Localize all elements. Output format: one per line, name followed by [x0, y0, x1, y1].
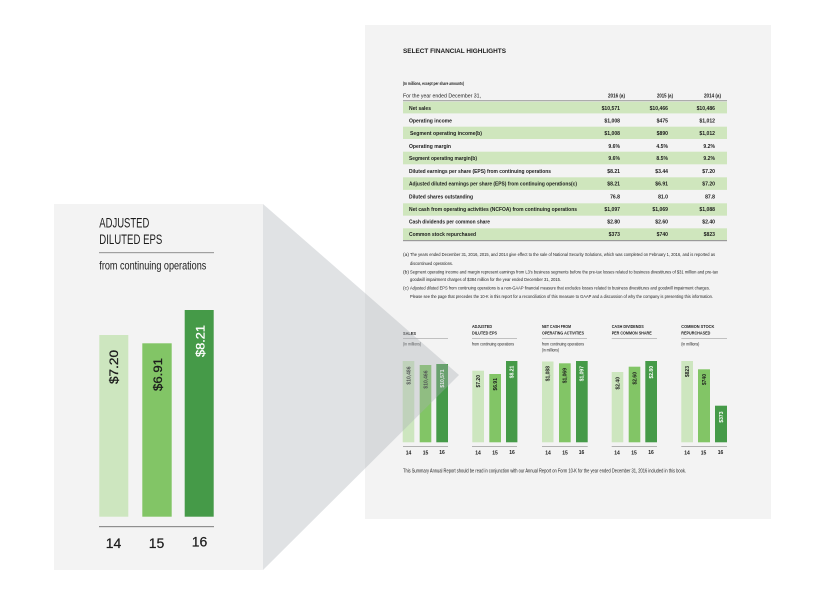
footnotes: (c) — [403, 286, 409, 292]
axis labels: 14 — [106, 535, 121, 551]
table: financial highlights: $1,012 — [699, 131, 715, 137]
table: financial highlights: Adjusted diluted earnings per share (EPS) from continuing operations(c) — [409, 182, 577, 188]
bar: 2015: $6.91 — [153, 358, 165, 391]
chart: cash dividends per common share: $2.80 — [649, 366, 655, 379]
chart: adjusted diluted eps: $6.91 — [493, 378, 499, 391]
chart: adjusted diluted eps: 16 — [509, 450, 515, 456]
chart: sales: $10,466 — [423, 370, 429, 389]
table: financial highlights: 9.2% — [703, 144, 715, 150]
table: financial highlights: $1,008 — [604, 118, 620, 124]
footnotes: (a) — [403, 252, 409, 258]
table: financial highlights: 9.2% — [703, 156, 715, 162]
table: financial highlights: 8.5% — [656, 156, 668, 162]
chart: sales: $10,571 — [440, 369, 446, 388]
chart: common stock repurchased: $823 — [685, 366, 691, 377]
chart: sales: (In millions) — [403, 342, 421, 346]
footnotes: Please see the page that precedes the 10-K in this report for a reconciliation of this measure to GAAP and a discussion of why the company is presenting this information. — [410, 294, 713, 300]
chart: sales: $10,486 — [406, 366, 412, 385]
table: financial highlights: Operating margin — [409, 144, 452, 150]
table: financial highlights: $890 — [657, 131, 668, 137]
chart: common stock repurchased — [681, 324, 727, 456]
table: financial highlights: $373 — [609, 232, 620, 238]
table: financial highlights: $823 — [704, 232, 715, 238]
table: financial highlights: $10,466 — [650, 106, 668, 112]
chart: cash dividends per common share — [612, 324, 657, 456]
axis labels: 15 — [149, 535, 164, 551]
chart: net cash from operating activities: 15 — [562, 450, 568, 456]
table: financial highlights: $475 — [657, 118, 668, 124]
bar: 2016: $8.21 — [196, 325, 208, 357]
footnotes: goodwill impairment charges of $384 million for the year ended December 31, 2015. — [410, 277, 561, 283]
chart: common stock repurchased: COMMON STOCK — [681, 324, 715, 329]
footnotes — [403, 252, 718, 300]
table: financial highlights: Diluted earnings per share (EPS) from continuing operations — [409, 169, 551, 175]
chart: adjusted diluted eps: $7.20 — [476, 375, 482, 388]
table: financial highlights: $1,069 — [652, 207, 668, 213]
chart: cash dividends per common share: 16 — [648, 450, 654, 456]
table: financial highlights: $2.80 — [607, 220, 620, 226]
panel: report page — [365, 25, 771, 519]
chart: sales — [403, 331, 448, 456]
bar: 2014 — [99, 335, 128, 517]
table: financial highlights: Operating income — [409, 118, 452, 124]
axis labels — [106, 534, 207, 551]
table: financial highlights: $7.20 — [702, 182, 715, 188]
table: financial highlights: $1,012 — [699, 118, 715, 124]
chart: cash dividends per common share: PER COMMON SHARE — [612, 330, 652, 336]
chart: net cash from operating activities: from continuing operations — [542, 342, 585, 346]
table: financial highlights: For the year ended December 31, — [403, 94, 481, 100]
subheading: from continuing operations — [99, 258, 206, 272]
footnotes: discontinued operations. — [410, 261, 453, 267]
chart: cash dividends per common share: 15 — [631, 450, 637, 456]
heading: select financial highlights: SELECT FINANCIAL HIGHLIGHTS — [403, 48, 506, 55]
table: financial highlights: $8.21 — [607, 169, 620, 175]
chart: common stock repurchased: 14 — [684, 450, 690, 456]
footnotes: (b) — [403, 270, 409, 276]
table: financial highlights: $6.91 — [655, 182, 668, 188]
bar: 2016 — [185, 310, 214, 517]
footer note: This Summary Annual Report should be read in conjunction with our Annual Report on Form 10-K for the year ended December 31, 2016 included in this book. — [403, 468, 686, 474]
footnotes: Adjusted diluted EPS from continuing operations is a non-GAAP financial measure that excludes losses related to business divestitures and goodwill impairment charges. — [410, 286, 710, 292]
table: financial highlights: Diluted shares outstanding — [409, 194, 474, 200]
chart: cash dividends per common share: CASH DIVIDENDS — [612, 324, 644, 329]
table: financial highlights: $10,486 — [697, 106, 715, 112]
table: financial highlights: (In millions, except per share amounts) — [403, 81, 464, 87]
table: financial highlights: $740 — [657, 232, 668, 238]
footnotes: Segment operating income and margin represent earnings from L3's business segments before the pre-tax losses related to business divestitures of $31 million and pre-tax — [410, 270, 718, 276]
table: financial highlights: $3.44 — [655, 169, 668, 175]
chart: net cash from operating activities: 16 — [579, 450, 584, 456]
chart: net cash from operating activities: NET CASH FROM — [542, 324, 571, 329]
chart: common stock repurchased: (in millions) — [681, 342, 700, 346]
table: financial highlights: 87.8 — [705, 194, 715, 200]
table: financial highlights: $8.21 — [607, 182, 620, 188]
chart: sales: 16 — [439, 450, 445, 456]
table: financial highlights: 9.6% — [608, 144, 620, 150]
table: financial highlights: 81.0 — [658, 194, 668, 200]
chart: net cash from operating activities: $1,069 — [563, 368, 569, 383]
table: financial highlights: Net cash from operating activities (NCFOA) from continuing operations — [409, 207, 577, 213]
chart: sales: SALES — [403, 331, 416, 336]
table: financial highlights — [403, 81, 727, 241]
chart: net cash from operating activities: (in millions) — [542, 348, 559, 352]
chart: net cash from operating activities — [542, 324, 588, 456]
table: financial highlights: Segment operating margin(b) — [409, 156, 477, 162]
chart: common stock repurchased: $740 — [702, 374, 708, 385]
bar: 2015 — [142, 343, 172, 517]
table: financial highlights: Common stock repurchased — [409, 232, 477, 238]
table: financial highlights: 76.8 — [610, 194, 620, 200]
table: financial highlights: $1,097 — [604, 207, 620, 213]
table: financial highlights: $1,088 — [699, 207, 715, 213]
heading: adjusted diluted eps: DILUTED EPS — [99, 231, 162, 247]
chart: net cash from operating activities: OPERATING ACTIVITIES — [542, 330, 584, 336]
table: financial highlights: $10,571 — [602, 106, 620, 112]
table: financial highlights: 2014 (a) — [704, 94, 721, 100]
chart: sales: 15 — [423, 450, 428, 456]
table: financial highlights: Cash dividends per common share — [409, 220, 490, 226]
chart: net cash from operating activities: $1,097 — [580, 366, 586, 381]
chart: adjusted diluted eps: DILUTED EPS — [472, 330, 497, 336]
chart: common stock repurchased: $373 — [719, 411, 725, 423]
table: financial highlights: $2.40 — [702, 220, 715, 226]
chart: adjusted diluted eps: $8.21 — [510, 365, 516, 378]
chart: cash dividends per common share: $2.40 — [615, 377, 621, 390]
chart: adjusted diluted eps — [472, 324, 517, 456]
axis labels: 16 — [192, 534, 207, 550]
heading: adjusted diluted eps — [99, 215, 162, 247]
chart: net cash from operating activities: 14 — [545, 450, 551, 456]
table: financial highlights: 2016 (a) — [608, 94, 625, 100]
table: financial highlights: 9.6% — [608, 156, 620, 162]
table: financial highlights: 4.5% — [656, 144, 668, 150]
chart: common stock repurchased: REPURCHASED — [681, 330, 711, 336]
bar: 2014: $7.20 — [109, 350, 121, 384]
heading: adjusted diluted eps: ADJUSTED — [99, 215, 149, 231]
panel: enlarged adjusted diluted eps chart — [54, 204, 263, 570]
zoom callout wedge — [263, 204, 459, 570]
table: financial highlights: $1,008 — [604, 131, 620, 137]
chart: cash dividends per common share: $2.60 — [632, 372, 638, 385]
footnotes: The years ended December 31, 2016, 2015, and 2014 give effect to the sale of National Security Solutions, which was completed on February 1, 2016, and is reported as — [410, 252, 715, 258]
chart: adjusted diluted eps: from continuing operations — [472, 342, 515, 346]
table: financial highlights: 2015 (a) — [657, 94, 673, 100]
table: financial highlights: Net sales — [409, 106, 431, 112]
chart: adjusted diluted eps: ADJUSTED — [472, 324, 493, 329]
table: financial highlights: $7.20 — [702, 169, 715, 175]
table: financial highlights: $2.60 — [655, 220, 668, 226]
chart: common stock repurchased: 15 — [701, 450, 706, 456]
chart: adjusted diluted eps: 15 — [492, 450, 498, 456]
chart: common stock repurchased: 16 — [718, 450, 723, 456]
chart: cash dividends per common share: 14 — [614, 450, 620, 456]
chart: sales: 14 — [406, 450, 411, 456]
chart: net cash from operating activities: $1,088 — [546, 366, 552, 381]
chart: adjusted diluted eps: 14 — [475, 450, 481, 456]
table: financial highlights: Segment operating income(b) — [410, 131, 482, 137]
